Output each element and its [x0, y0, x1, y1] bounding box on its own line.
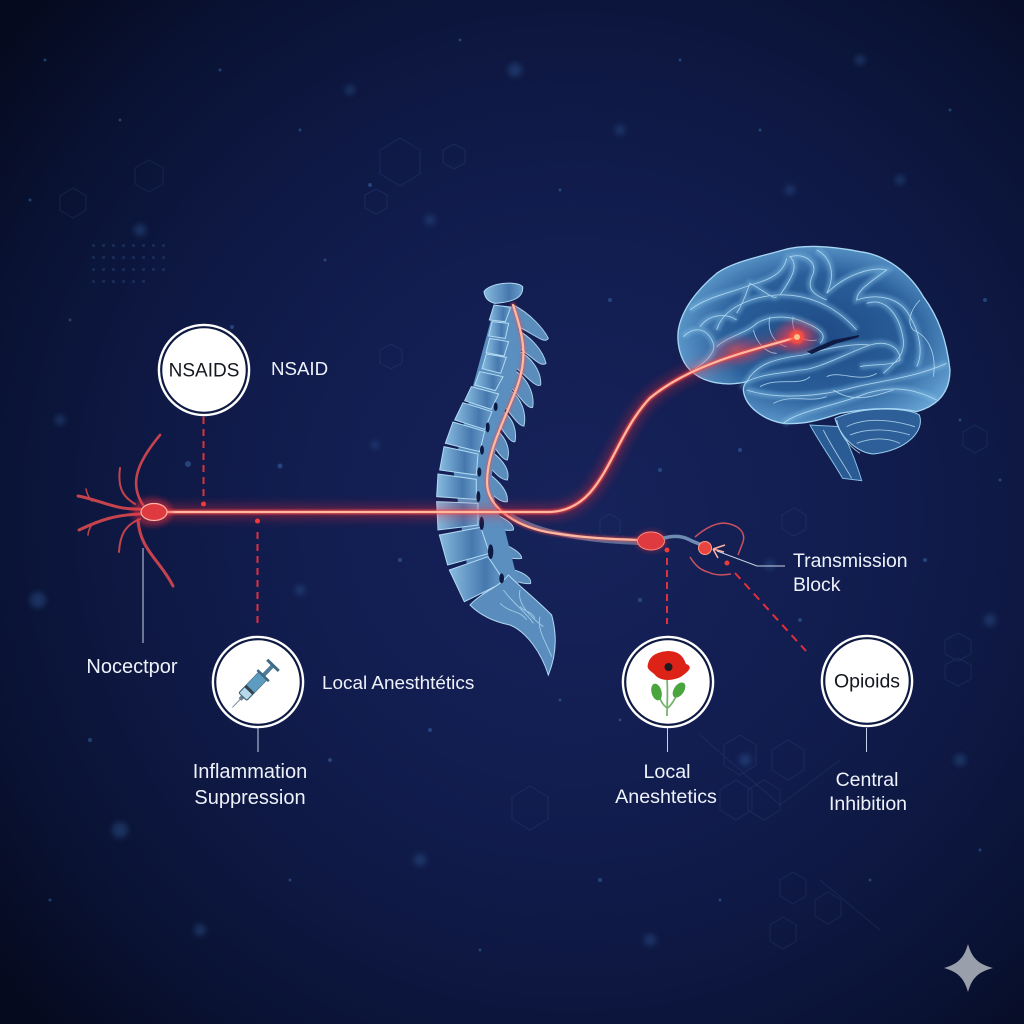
label: Central Inhibition: Central: [836, 769, 898, 791]
cerebrum outline: [678, 246, 950, 424]
label: NSAID: NSAID: [271, 358, 328, 379]
label: Local Anesthetics: Aneshtetics: [615, 786, 717, 808]
background hexagon network: [60, 138, 987, 949]
sacrum: [470, 575, 555, 675]
spinous processes: [482, 305, 548, 584]
dashed connector: poppy to node: [664, 548, 670, 624]
leader line: nociceptor: [142, 548, 144, 643]
brain activation glow: [708, 317, 822, 367]
label: Central Inhibition: Inhibition: [829, 793, 907, 815]
syringe badge: [212, 636, 304, 728]
vertebra bodies: [437, 283, 523, 602]
leader line: opioids: [866, 728, 868, 752]
brain stem: [810, 425, 862, 481]
opioids badge: [821, 635, 913, 727]
main pain signal pathway to brain: [160, 337, 798, 512]
cell body: [141, 504, 167, 520]
cell body glow: [132, 498, 172, 526]
icon: poppy flower: [648, 651, 690, 716]
icon: syringe: [227, 659, 280, 713]
opioids badge: Opioids: [834, 670, 900, 692]
label: Inflammation Suppression: Suppression: [194, 787, 306, 809]
dashed connector: syringe to pathway: [255, 518, 260, 625]
label: Inflammation Suppression: Inflammation: [193, 761, 307, 783]
spine illustration: [437, 283, 555, 675]
brain folds: [683, 250, 947, 478]
poppy badge: [622, 636, 714, 728]
dendrites: [78, 435, 173, 586]
dashed connector: NSAIDS to pathway: [201, 417, 206, 506]
NSAIDS badge: NSAIDS: [169, 360, 239, 382]
dashed connector: opioids to synapse: [724, 560, 806, 651]
nociceptor neuron: [78, 435, 173, 586]
ascending pain signal through spinal cord: [487, 305, 640, 540]
brain illustration: [678, 246, 950, 481]
spinal foramina: [476, 402, 504, 583]
NSAIDS badge: [158, 324, 250, 416]
leader line: poppy: [666, 728, 668, 752]
icon: sparkle watermark: [944, 944, 993, 992]
background dot grid: [92, 244, 165, 283]
synapse terminal: [690, 523, 744, 575]
cerebellum: [835, 409, 920, 454]
brain fold highlights: [683, 250, 947, 423]
return nerve grey sheath: [510, 515, 640, 543]
second neuron node: [636, 531, 702, 551]
label: Transmission Block: Block: [793, 574, 841, 596]
label: Nocectpor: Nocectpor: [86, 656, 178, 678]
leader line: transmission block: [717, 551, 785, 566]
leader line: syringe: [257, 728, 259, 752]
label: Local Anesthtetics: Local Anesthtétics: [322, 673, 474, 694]
neural arch column: [453, 305, 523, 603]
brain signal endpoint: [790, 330, 804, 344]
label: Local Anesthetics: Local: [643, 761, 691, 783]
label: Transmission Block: Transmission: [793, 550, 908, 572]
dark fissure: [807, 335, 859, 354]
